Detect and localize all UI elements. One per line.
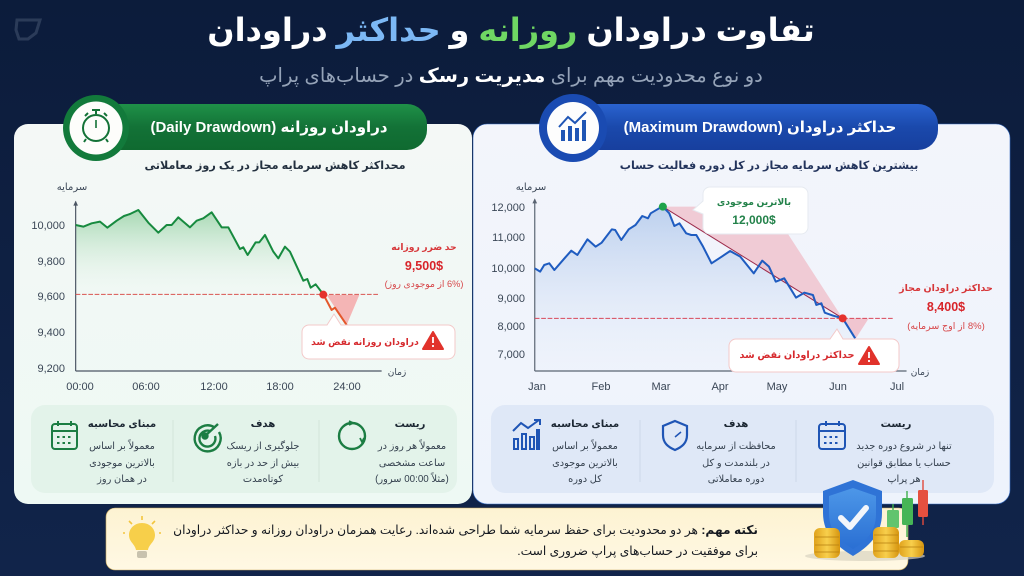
maximum basis [551,419,619,485]
chart: maximum equity: 10,000 [491,263,525,275]
icon: bar chart [513,420,540,449]
chart: daily equity: 9,400 [37,327,65,339]
maximum header pill: حداکثر دراودان (Maximum Drawdown) [624,119,896,136]
daily basis: بالاترین موجودی [89,458,155,469]
chart: maximum equity: Jul [890,381,904,393]
daily info strip [31,405,457,493]
panel: maximum drawdown [473,94,1010,504]
note box: نکته مهم: هر دو محدودیت برای حفظ سرمایه شما طراحی شده‌اند. رعایت همزمان دراودان روزانه و حداکثر دراودان [173,523,758,538]
daily limit label: (6% از موجودی روز) [385,279,463,289]
chart: maximum equity: 8,000 [497,321,525,333]
icon: shield [663,421,687,450]
daily basis: معمولاً بر اساس [89,439,155,452]
maximum reset: ریست [881,419,912,430]
maximum goal: دوره معاملاتی [708,474,764,485]
daily goal: کوتاه‌مدت [243,474,283,485]
icon: calendar [52,421,77,449]
chart: daily equity: 9,800 [37,256,65,268]
maximum limit label [898,283,993,332]
chart: maximum equity: Feb [592,381,610,393]
chart: maximum equity: 12,000 [491,202,525,214]
chart: maximum equity: May [767,381,788,393]
chart: daily equity: زمان [388,367,406,377]
maximum goal: محافظت از سرمایه [696,441,776,452]
chart: daily equity: 00:00 [66,381,94,393]
icon: light bulb [123,516,161,558]
peak callout: 12,000$ [732,213,776,227]
chart: maximum equity: 11,000 [492,232,525,244]
chart: daily equity: 18:00 [266,381,294,393]
daily limit label [385,242,463,289]
daily reset: ساعت مشخصی [379,458,445,469]
daily basis [88,419,156,485]
daily limit label: 9,500$ [405,259,443,273]
icon: calendar [819,421,845,449]
maximum subtitle: بیشترین کاهش سرمایه مجاز در کل دوره فعالیت حساب [620,160,918,172]
chart: maximum equity: Jan [528,381,546,393]
chart: maximum equity: Apr [711,381,729,393]
chart: maximum equity [491,182,929,393]
note box [106,508,908,570]
maximum basis: کل دوره [568,474,602,485]
chart: daily equity: 10,000 [31,220,65,232]
daily goal: جلوگیری از ریسک [227,440,299,452]
subtitle: دو نوع محدودیت مهم برای مدیریت رسک در حساب‌های پراپ [259,65,763,87]
daily limit label: حد ضرر روزانه [391,242,457,253]
chart: daily equity: 9,600 [37,291,65,303]
coins [814,527,924,558]
daily header pill [63,95,427,161]
daily reset [375,419,449,485]
maximum goal: هدف [724,419,748,430]
maximum goal [696,419,776,485]
logo mark [16,20,40,39]
chart: maximum equity: Jun [829,381,847,393]
chart: daily equity: 9,200 [37,363,65,375]
shield [823,480,882,556]
maximum reset: حساب یا مطابق قوانین [857,458,951,469]
chart: daily equity: 06:00 [132,381,160,393]
maximum goal: در بلندمدت و کل [702,458,770,469]
chart: daily equity: 12:00 [200,381,228,393]
maximum reset [856,419,952,485]
chart: maximum equity: سرمایه [516,182,546,193]
daily goal: هدف [251,419,275,430]
illustration: shield, coins and candles [805,480,928,561]
chart: maximum equity: Mar [652,381,671,393]
maximum header pill [539,94,938,162]
daily basis: مبنای محاسبه [88,419,156,430]
maximum basis: بالاترین موجودی [552,458,618,469]
maximum reset: هر پراپ [887,474,921,485]
chart: daily equity [31,182,406,393]
chart: maximum equity: زمان [911,367,929,377]
icon: reset [339,421,365,449]
daily header pill: دراودان روزانه (Daily Drawdown) [150,119,388,136]
maximum limit label: حداکثر دراودان مجاز [898,283,993,294]
chart: maximum equity: 7,000 [497,349,525,361]
maximum info strip [491,405,994,493]
panel: daily drawdown [14,95,472,504]
maximum limit label: (8% از اوج سرمایه) [907,321,985,332]
maximum basis: معمولاً بر اساس [552,439,618,452]
title: تفاوت دراودان روزانه و حداکثر دراودان [207,12,815,49]
daily breach callout: دراودان روزانه نقض شد [311,337,419,348]
maximum reset: تنها در شروع دوره جدید [856,441,952,452]
daily basis: در همان روز [96,474,147,485]
peak callout: بالاترین موجودی [717,197,791,208]
peak callout [693,187,808,234]
daily goal [227,419,299,485]
maximum breach callout: حداکثر دراودان نقض شد [740,350,855,361]
daily breach callout [302,314,455,359]
chart: maximum equity: 9,000 [497,293,525,305]
chart: daily equity: 24:00 [333,381,361,393]
note box: برای موفقیت در حساب‌های پراپ ضروری است. [517,544,758,559]
maximum breach callout [729,329,899,372]
daily goal: بیش از حد در بازه [227,458,299,469]
chart: daily equity: سرمایه [57,182,87,193]
candles [887,480,928,537]
daily reset: معمولاً هر روز در [377,439,446,452]
daily subtitle: محداکثر کاهش سرمایه مجاز در یک روز معاملاتی [144,160,406,172]
daily reset: ریست [395,419,426,430]
icon: target [195,424,221,451]
maximum basis: مبنای محاسبه [551,419,619,430]
maximum limit label: 8,400$ [927,300,965,314]
daily reset: (مثلاً 00:00 سرور) [375,472,449,485]
